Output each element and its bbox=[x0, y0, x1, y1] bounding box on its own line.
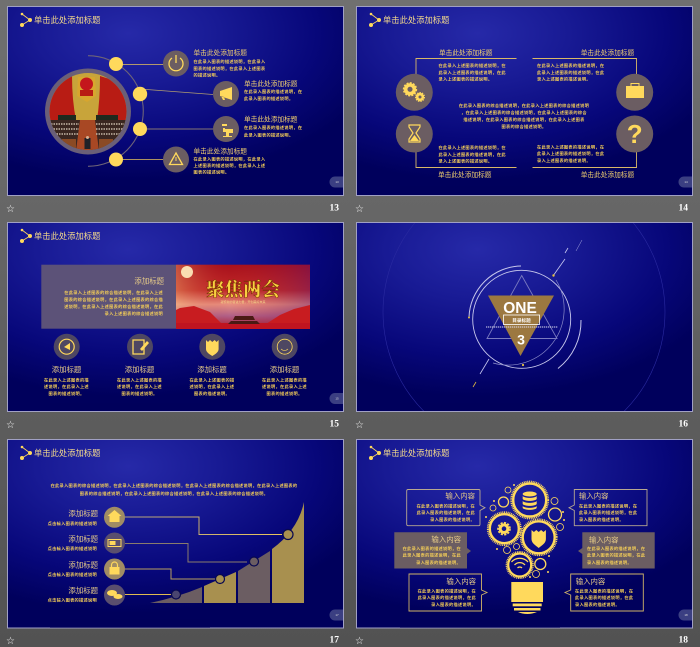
text block 1: 单击此处添加标题 bbox=[194, 48, 247, 57]
body top right bbox=[537, 62, 605, 82]
text block 3 bbox=[244, 114, 302, 138]
database icon bbox=[523, 492, 537, 510]
slide 13 footer: 13 bbox=[330, 204, 339, 214]
text panel: 在此录入上述图表的综合描述说明，在此录入上述 bbox=[64, 289, 164, 296]
callout top left: 此录入图表的描述说明，在此 bbox=[417, 509, 476, 516]
slide 16: section divider bbox=[356, 222, 693, 412]
callout middle left bbox=[394, 532, 471, 568]
section label: 目录标题 bbox=[512, 317, 531, 324]
text block 2: 在此录入图表的描述说明，在 bbox=[244, 88, 302, 95]
body centre bbox=[459, 102, 589, 130]
slide 15 footer: ☆ bbox=[6, 420, 15, 431]
column 1: 在此录入上述图表的描 bbox=[44, 376, 89, 384]
heading bottom right: 单击此处添加标题 bbox=[581, 170, 635, 179]
row label 3 bbox=[48, 561, 99, 578]
callout top right bbox=[569, 490, 647, 526]
slide 14 footer bbox=[355, 204, 688, 215]
title: 单击此处添加标题 bbox=[34, 15, 100, 25]
page pill bbox=[678, 176, 692, 188]
icon: house bbox=[104, 507, 125, 528]
body centre: 图表的综合描述说明。 bbox=[502, 123, 546, 130]
slide 18 footer: ☆ bbox=[355, 636, 364, 647]
icon: battery bbox=[104, 532, 125, 554]
slide 13: circular image with four items bbox=[8, 6, 344, 196]
icon: question mark bbox=[616, 116, 653, 152]
text block 2: 单击此处添加标题 bbox=[244, 79, 298, 88]
title: 单击此处添加标题 bbox=[383, 448, 449, 458]
column 2: 述说明，在此录入上述 bbox=[117, 383, 162, 390]
body bottom left: 此录入上述图表的描述说明，在此 bbox=[438, 151, 506, 158]
callout bottom left bbox=[409, 574, 487, 611]
body top left: 在此录入上述图表的描述说明，在 bbox=[438, 62, 506, 69]
text block 3: 单击此处添加标题 bbox=[244, 114, 298, 124]
gear icon bbox=[498, 523, 510, 535]
brackets bbox=[416, 58, 636, 168]
node dots bbox=[109, 57, 147, 166]
body bottom right: 此录入上述图表的描述说明，在此 bbox=[537, 150, 605, 157]
column 4: 在此录入上述图表的描 bbox=[262, 376, 307, 384]
body bottom left bbox=[438, 144, 506, 164]
callout middle right: 输入内容 bbox=[589, 535, 619, 544]
callout bottom right: 输入内容 bbox=[576, 577, 606, 586]
slide 18 footer bbox=[355, 636, 688, 647]
photo of assembly hall bbox=[45, 68, 131, 154]
callout middle left: 此录入图表的描述说明，在此 bbox=[403, 552, 462, 558]
page pill: 17 bbox=[335, 613, 339, 617]
accent dots and diagonal dashes bbox=[468, 240, 582, 387]
banner image: 凝聚新的奋进力量，开创美好未来 bbox=[220, 299, 266, 304]
row label 2: 添加标题 bbox=[68, 535, 99, 544]
icon: smile bbox=[272, 334, 298, 360]
callout bottom left: 在此录入图表的描述说明，在 bbox=[418, 588, 476, 594]
slide 17: growth chart bbox=[8, 440, 344, 628]
row label 4: 添加标题 bbox=[68, 586, 99, 595]
icon: padlock bbox=[104, 558, 125, 580]
column 1: 述说明，在此录入上述 bbox=[44, 383, 89, 390]
slide 17 footer: ☆ bbox=[6, 636, 15, 647]
row label 1 bbox=[48, 509, 99, 527]
callout bottom left: 此录入图表的描述说明，在此 bbox=[418, 594, 477, 601]
column 4 bbox=[262, 365, 307, 397]
callout top left bbox=[407, 490, 485, 526]
body bottom left: 在此录入上述图表的描述说明，在 bbox=[438, 144, 506, 151]
faint outer ring bbox=[382, 223, 666, 411]
text panel bbox=[41, 265, 176, 329]
section label: ONE bbox=[503, 300, 537, 317]
page pill bbox=[678, 610, 692, 620]
body centre: 在此录入图表的综合描述说明，在此录入上述图表的综合描述说明 bbox=[459, 102, 589, 109]
page pill bbox=[330, 393, 343, 404]
body top right: 此录入上述图表的描述说明，在此 bbox=[537, 69, 605, 76]
callout bottom right: 在此录入图表的描述说明，在 bbox=[575, 588, 633, 594]
body bottom left: 录入上述图表的描述说明。 bbox=[438, 158, 492, 164]
heading bottom left: 单击此处添加标题 bbox=[438, 170, 492, 179]
body top left: 此录入上述图表的描述说明，在此 bbox=[438, 69, 506, 76]
body bottom right bbox=[537, 144, 605, 164]
wifi icon bbox=[512, 558, 528, 568]
title icon bbox=[369, 446, 381, 460]
icon: warning bbox=[163, 146, 189, 172]
slide 15 footer: 15 bbox=[330, 420, 339, 430]
heading top right: 单击此处添加标题 bbox=[581, 48, 635, 57]
icon: shield bbox=[199, 334, 225, 360]
slide 15: banner and four columns bbox=[8, 222, 344, 412]
arc bbox=[88, 56, 143, 166]
connector lines bbox=[116, 64, 213, 160]
column 4: 图表的描述说明。 bbox=[267, 390, 302, 397]
text panel: 述说明，在此录入上述图表的综合描述说明，在此 bbox=[64, 303, 164, 310]
slide 14 footer: ☆ bbox=[355, 204, 364, 215]
page pill: 18 bbox=[684, 613, 688, 617]
callout top right: 此录入图表的描述说明，在此 bbox=[579, 509, 638, 516]
body top right: 录入上述图表的描述说明。 bbox=[537, 76, 591, 82]
title: 单击此处添加标题 bbox=[34, 448, 100, 458]
banner image bbox=[176, 265, 310, 329]
area chart bars bbox=[150, 502, 304, 603]
slide 16 footer bbox=[355, 420, 688, 431]
row label 2 bbox=[48, 535, 99, 552]
connector lines bbox=[124, 517, 282, 594]
slide 14: four circles with brackets bbox=[356, 6, 692, 196]
column 2: 图表的描述说明。 bbox=[122, 390, 157, 397]
intro text bbox=[51, 482, 297, 497]
callout middle right: 录入图表的描述说明。 bbox=[587, 559, 632, 566]
callout top right: 在此录入图表的描述说明，在 bbox=[579, 502, 637, 510]
icon: hourglass bbox=[396, 116, 433, 152]
icon: megaphone bbox=[213, 81, 239, 107]
row label 2: 点击输入图表的描述说明 bbox=[48, 545, 97, 552]
text block 4: 在此录入图表的描述说明，在此录入 bbox=[194, 156, 266, 162]
page pill bbox=[330, 610, 343, 620]
text block 2: 此录入图表的描述说明。 bbox=[244, 95, 293, 102]
icon: signpost bbox=[213, 116, 239, 142]
title icon bbox=[20, 13, 32, 27]
callout middle left: 录入图表的描述说明。 bbox=[416, 559, 461, 566]
column 4: 添加标题 bbox=[270, 365, 300, 374]
body top left: 录入上述图表的描述说明。 bbox=[438, 76, 492, 82]
banner image: 聚焦两会 bbox=[206, 279, 280, 301]
row label 3: 添加标题 bbox=[68, 561, 99, 570]
row label 1: 点击输入图表的描述说明 bbox=[48, 520, 97, 527]
text block 1 bbox=[194, 48, 266, 78]
row label 4: 点击输入图表的描述说明 bbox=[48, 596, 97, 604]
icon: speech bubbles bbox=[104, 584, 125, 606]
callout top right: 录入图表的描述说明。 bbox=[579, 516, 624, 523]
text block 2 bbox=[244, 79, 302, 102]
row label 4 bbox=[48, 586, 99, 604]
slide 13 footer bbox=[6, 204, 339, 215]
slide 16 footer: ☆ bbox=[355, 420, 364, 431]
callout bottom right: 此录入图表的描述说明，在此 bbox=[575, 594, 634, 601]
column 1: 添加标题 bbox=[52, 365, 82, 374]
text block 1: 在此录入图表的描述说明，在此录入 bbox=[194, 58, 266, 65]
slide 18 footer: 18 bbox=[678, 636, 688, 646]
text panel: 添加标题 bbox=[134, 276, 165, 286]
slide 16 footer: 16 bbox=[678, 420, 688, 430]
small bulb dots bbox=[485, 484, 565, 578]
body bottom right: 在此录入上述图表的描述说明，在 bbox=[537, 144, 604, 150]
shield icon bbox=[532, 530, 546, 548]
text block 4: 上述图表的描述说明，在此录入上述 bbox=[194, 162, 266, 169]
text panel: 录入上述图表的综合描述说明 bbox=[105, 310, 163, 317]
triangle outline bbox=[487, 276, 557, 338]
column 3: 述说明，在此录入上述 bbox=[190, 383, 235, 390]
column 3: 添加标题 bbox=[197, 365, 227, 374]
text block 1: 图表的描述说明，在此录入上述图表 bbox=[194, 65, 266, 72]
column 1: 图表的描述说明。 bbox=[49, 390, 84, 397]
body top right: 在此录入上述图表的描述说明，在 bbox=[537, 62, 604, 69]
text block 1: 的描述说明。 bbox=[194, 72, 220, 78]
text block 3: 在此录入图表的描述说明，在 bbox=[244, 124, 302, 131]
row label 1: 添加标题 bbox=[68, 509, 99, 518]
section label: 3 bbox=[517, 332, 525, 348]
callout middle right: 在此录入图表的描述说明，在 bbox=[587, 545, 645, 552]
page pill: 15 bbox=[335, 396, 339, 400]
page pill: 14 bbox=[684, 180, 688, 184]
callout middle left: 在此录入图表的描述说明，在 bbox=[403, 545, 461, 552]
callout top right: 输入内容 bbox=[579, 492, 609, 500]
callout bottom right bbox=[565, 574, 643, 611]
body centre: ，在此录入上述图表的综合描述说明，在此录入上述图表的综合 bbox=[461, 109, 587, 116]
slide 15 footer bbox=[6, 420, 339, 431]
column 2: 在此录入上述图表的描 bbox=[117, 376, 162, 384]
callout bottom left: 录入图表的描述说明。 bbox=[431, 601, 476, 608]
page pill bbox=[330, 176, 343, 188]
icon: question mark: ? bbox=[627, 119, 643, 149]
intro text: 图表的综合描述说明，在此录入上述图表的综合描述说明，在此录入上述图表的综合描述说明。 bbox=[80, 490, 268, 497]
text block 4: 单击此处添加标题 bbox=[194, 146, 247, 155]
slide 13 footer: ☆ bbox=[6, 204, 15, 215]
column 2: 添加标题 bbox=[125, 365, 155, 374]
title icon bbox=[20, 229, 32, 243]
column 2 bbox=[117, 365, 162, 397]
heading top left: 单击此处添加标题 bbox=[439, 48, 493, 57]
column 4: 述说明，在此录入上述 bbox=[262, 383, 307, 390]
column 3: 图表的描述说明。 bbox=[194, 390, 230, 397]
text block 3: 此录入图表的描述说明。 bbox=[244, 132, 293, 138]
column 1 bbox=[44, 365, 89, 397]
icon: note bbox=[127, 334, 153, 360]
callout top left: 在此录入图表的描述说明，在 bbox=[417, 502, 475, 510]
body bottom right: 录入上述图表的描述说明。 bbox=[537, 157, 591, 164]
icon: gears bbox=[396, 74, 433, 111]
body top left bbox=[438, 62, 506, 82]
text block 4: 图表的描述说明。 bbox=[194, 168, 229, 176]
column 3: 在此录入上述图表的描 bbox=[190, 376, 234, 384]
text block 4 bbox=[194, 146, 266, 176]
title icon bbox=[20, 446, 32, 460]
title: 单击此处添加标题 bbox=[34, 231, 100, 241]
intro text: 在此录入图表的综合描述说明，在此录入上述图表的综合描述说明，在此录入上述图表的综合描述说明，在此录入上述图表的 bbox=[51, 482, 297, 489]
row label 3: 点击输入图表的描述说明 bbox=[48, 571, 97, 578]
slide 14 footer: 14 bbox=[678, 204, 688, 214]
callout top left: 录入图表的描述说明。 bbox=[430, 516, 475, 523]
page pill: 13 bbox=[335, 180, 339, 184]
callout bottom left: 输入内容 bbox=[446, 577, 477, 586]
gold triangle bbox=[488, 296, 554, 356]
light bulb of gears bbox=[485, 482, 565, 614]
bulb base bbox=[511, 582, 543, 614]
slide 17 footer: 17 bbox=[330, 636, 339, 646]
callout middle right: 此录入图表的描述说明，在此 bbox=[587, 552, 646, 558]
chart nodes bbox=[172, 530, 293, 599]
slide 18: light bulb with callouts bbox=[356, 440, 692, 628]
icon: power bbox=[163, 50, 189, 76]
column 3 bbox=[190, 365, 235, 397]
title icon bbox=[369, 13, 381, 27]
body centre: 描述说明，在此录入图表的综合描述说明，在此录入上述图表 bbox=[463, 116, 585, 123]
white rings and arcs bbox=[469, 266, 581, 368]
icon: play dial bbox=[54, 334, 80, 360]
callout middle right bbox=[578, 532, 655, 568]
callout bottom right: 录入图表的描述说明。 bbox=[575, 601, 620, 608]
callout top left: 输入内容 bbox=[445, 492, 476, 500]
callout middle left: 输入内容 bbox=[431, 535, 462, 544]
slide 17 footer bbox=[6, 636, 339, 647]
title: 单击此处添加标题 bbox=[383, 15, 449, 25]
text panel: 图表的综合描述说明，在此录入上述图表的综合描 bbox=[64, 296, 163, 303]
section label bbox=[486, 300, 558, 348]
icon: briefcase bbox=[616, 74, 653, 111]
